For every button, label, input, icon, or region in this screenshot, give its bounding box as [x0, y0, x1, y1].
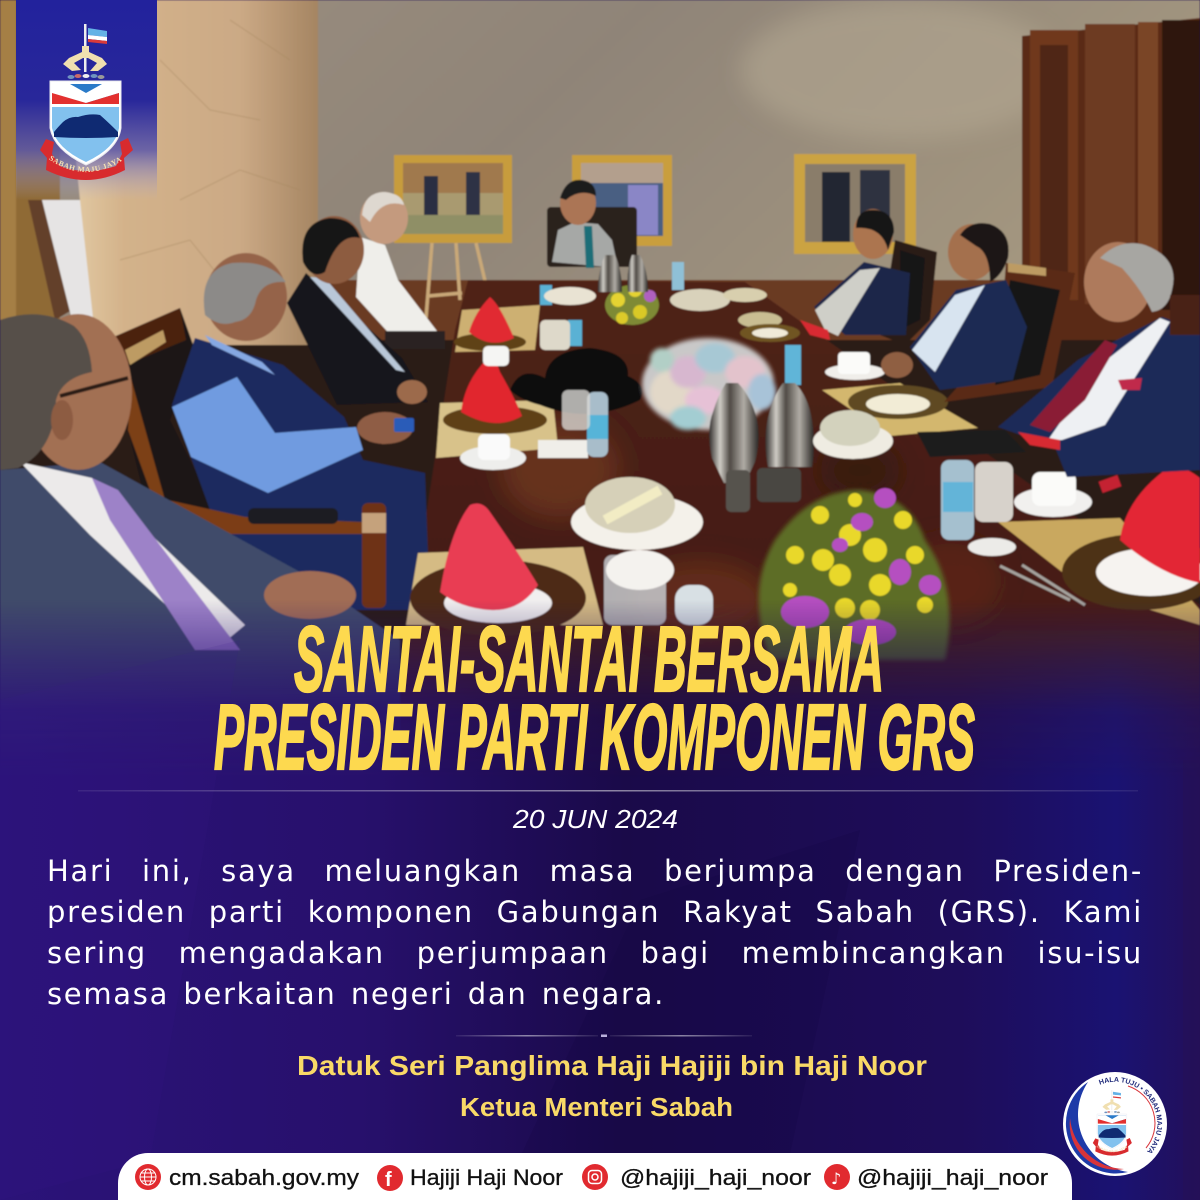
title rule	[78, 790, 1138, 792]
thermos flasks	[598, 255, 814, 512]
pill background	[118, 1153, 1072, 1200]
ring motto: HALA TUJU • SABAH MAJU JAYA	[1098, 1077, 1162, 1153]
chair arm and post	[168, 500, 386, 608]
shield	[50, 81, 121, 165]
room wall	[0, 0, 1200, 340]
charger front	[410, 560, 586, 636]
napkin front	[440, 504, 538, 610]
carved wood screen right	[1022, 18, 1200, 340]
clasped hands	[63, 46, 107, 71]
water glasses and bottles left	[540, 262, 801, 625]
man in blue vest chair	[100, 308, 215, 530]
cups	[460, 446, 526, 470]
icon: globe	[135, 1164, 161, 1190]
dark floor behind the chairs	[0, 330, 1200, 810]
man in blue vest	[172, 253, 430, 610]
dome plate right	[813, 423, 893, 459]
wall texture highlight	[740, 0, 1060, 140]
plate front	[444, 583, 552, 623]
right place settings	[813, 383, 1200, 625]
chair back far right edge	[1170, 295, 1200, 335]
saucer right	[1014, 487, 1092, 517]
bottle right	[941, 460, 974, 540]
chevron stripes	[52, 84, 119, 103]
instagram handle: @hajiji_haji_noor	[620, 1165, 812, 1190]
icon: facebook: f	[385, 1169, 392, 1191]
napkin middle	[461, 358, 522, 423]
title	[214, 607, 975, 789]
body paragraph: Hari ini, saya meluangkan masa berjumpa dengan Presiden-	[47, 854, 1143, 888]
body paragraph: presiden parti komponen Gabungan Rakyat Sabah (GRS). Kami	[47, 895, 1143, 929]
crest: Sabah logo banner top left	[16, 0, 157, 197]
far table settings	[540, 287, 885, 380]
icon: facebook	[377, 1165, 403, 1191]
cup right	[1032, 472, 1076, 506]
place settings left	[406, 297, 603, 636]
table highlights	[500, 420, 1000, 640]
picture frame left	[394, 155, 512, 243]
dome plate near centre	[571, 477, 703, 550]
charger front right	[1062, 534, 1200, 610]
picture frame centre	[572, 155, 672, 246]
curtain	[0, 0, 100, 340]
icon: tiktok: ♪	[831, 1169, 841, 1188]
yellow and orchid flower bouquet	[759, 488, 950, 660]
red crescent	[1070, 1118, 1124, 1170]
purple gradient overlay for the lower panel	[0, 560, 1200, 1200]
signature divider	[456, 1034, 752, 1037]
blue crescent	[1066, 1082, 1128, 1173]
black hat	[510, 348, 642, 414]
placemat front	[406, 547, 603, 625]
charger back	[454, 333, 526, 351]
man in black suit	[287, 216, 428, 405]
author name: Datuk Seri Panglima Haji Hajiji bin Haji Noor	[297, 1050, 927, 1081]
footer pill	[118, 1153, 1072, 1200]
icon: tiktok	[824, 1164, 850, 1190]
date: 20 JUN 2024	[512, 804, 678, 834]
placemat back	[455, 305, 540, 352]
thermos right	[766, 383, 814, 467]
centre man: seated at head of table	[547, 180, 637, 268]
marble veins	[120, 20, 300, 290]
plate front right	[1096, 548, 1200, 596]
facebook name: Hajiji Haji Noor	[410, 1165, 564, 1190]
thin red ring	[1128, 1086, 1155, 1148]
man in navy suit middle right	[881, 223, 1075, 402]
napkin back	[469, 297, 514, 343]
white disc	[1063, 1072, 1167, 1176]
beads	[68, 74, 104, 79]
man in pinstripe suit	[998, 242, 1200, 493]
marble column	[60, 0, 318, 345]
thermos far	[598, 255, 622, 292]
mountain	[54, 114, 118, 138]
fork and knife	[1000, 565, 1085, 605]
picture frame right	[794, 154, 916, 254]
water glass right	[968, 538, 1016, 556]
body paragraph: sering mengadakan perjumpaan bagi membincangkan isu-isu	[47, 936, 1143, 970]
charger middle right	[848, 385, 948, 419]
charger middle	[443, 406, 547, 434]
man in navy suit far right	[800, 209, 937, 345]
background facets	[0, 640, 1200, 1200]
salt shakers	[726, 470, 750, 512]
blue banner	[16, 0, 157, 200]
plate middle right	[866, 394, 930, 414]
skirting wood	[310, 280, 1030, 340]
notebook	[917, 430, 1026, 457]
small crest	[1093, 1090, 1132, 1156]
icon: instagram	[582, 1164, 608, 1190]
website: cm.sabah.gov.my	[169, 1165, 360, 1190]
body paragraph: semasa berkaitan negeri dan negara.	[47, 977, 665, 1011]
ribbon motto: SABAH MAJU JAYA	[49, 156, 122, 172]
table top	[380, 280, 1200, 810]
chair middle right	[944, 263, 1075, 402]
small yellow and purple flowers	[605, 283, 659, 325]
flag	[88, 28, 107, 44]
easel	[426, 243, 486, 318]
flag pole	[84, 24, 86, 72]
pastel hydrangea flowers	[642, 338, 776, 430]
front-left man in grey suit	[0, 314, 400, 810]
tiktok handle: @hajiji_haji_noor	[857, 1165, 1049, 1190]
author role: Ketua Menteri Sabah	[460, 1094, 733, 1122]
placemat middle	[436, 400, 558, 458]
thermos left	[709, 383, 759, 483]
coat of arms	[40, 24, 133, 180]
photo: meeting around the table	[0, 0, 1200, 810]
napkin right	[1120, 467, 1200, 583]
mat front right	[998, 518, 1200, 625]
mat middle right	[822, 383, 978, 436]
ribbon	[40, 138, 133, 180]
body paragraph	[47, 854, 1152, 1190]
round logo: Hala Tuju Sabah Maju Jaya	[1063, 1072, 1167, 1176]
man in white shirt	[356, 192, 445, 349]
chair far right	[880, 240, 937, 345]
